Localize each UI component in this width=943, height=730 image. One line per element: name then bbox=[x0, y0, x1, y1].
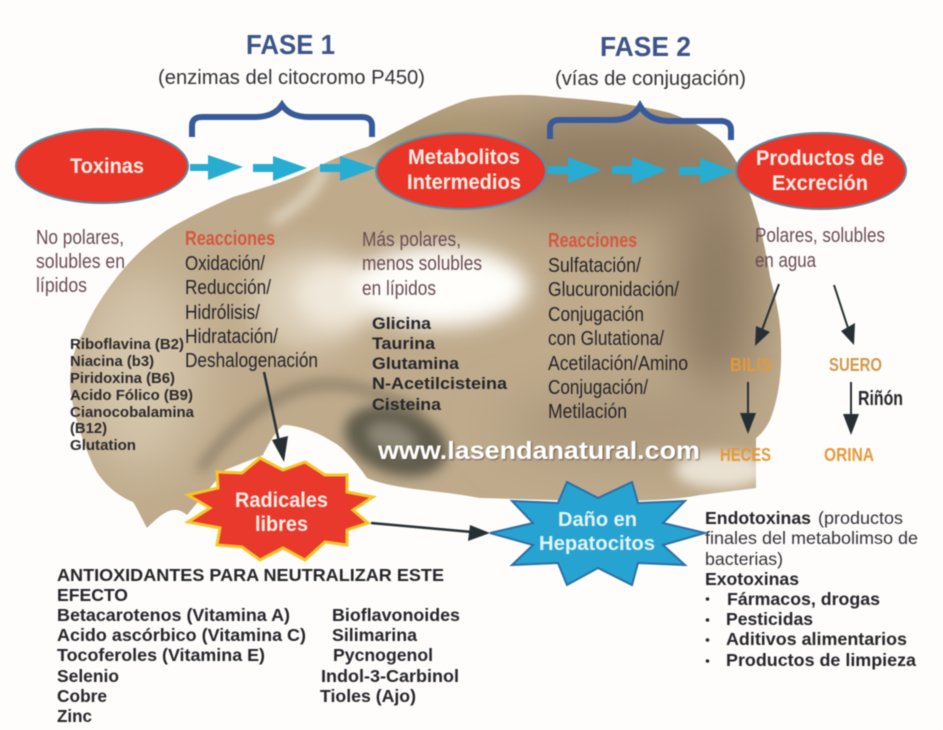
arrows: Fase 2 flow bbox=[548, 157, 735, 184]
labels: excretion routes: HECES bbox=[720, 445, 771, 465]
arrow: to orina bbox=[843, 382, 859, 435]
text block: endotoxinas y exotoxinas: Endotoxinas bbox=[705, 508, 811, 528]
text block: antioxidantes: Indol-3-Carbinol bbox=[321, 666, 459, 686]
heading: Fase 2: (vías de conjugación) bbox=[555, 68, 746, 90]
list: aminoácidos: N-Acetilcisteina bbox=[372, 374, 508, 393]
labels: excretion routes: BILIS bbox=[730, 355, 772, 375]
text block: antioxidantes: Pycnogenol bbox=[333, 645, 433, 665]
text: reacciones fase 2: Reacciones bbox=[548, 229, 637, 252]
heading: Fase 2 bbox=[555, 31, 746, 90]
text block: antioxidantes: Acido ascórbico (Vitamina C) bbox=[57, 625, 306, 645]
text block: antioxidantes: Cobre bbox=[57, 686, 107, 706]
node: Metabolitos Intermedios bbox=[376, 133, 546, 209]
text: reacciones fase 2: Conjugación bbox=[548, 303, 644, 326]
list: vitaminas: Niacina (b3) bbox=[70, 354, 154, 370]
text: polares solubles en agua: Polares, solubles bbox=[755, 224, 885, 247]
list: aminoácidos: Glicina bbox=[372, 314, 432, 333]
list: vitaminas: Riboflavina (B2) bbox=[70, 337, 184, 353]
text block: antioxidantes: ANTIOXIDANTES PARA NEUTRALIZAR ESTE bbox=[57, 565, 444, 585]
starburst: Daño en Hepatocitos bbox=[490, 482, 705, 585]
starburst: Radicales libres bbox=[188, 458, 373, 560]
list: vitaminas bbox=[70, 337, 195, 454]
list: aminoácidos: Taurina bbox=[372, 334, 436, 353]
text: reacciones fase 1: Hidrólisis/ bbox=[185, 301, 260, 324]
text block: antioxidantes: Tioles (Ajo) bbox=[320, 686, 416, 706]
text block: endotoxinas y exotoxinas: (productos bbox=[818, 508, 903, 528]
text: reacciones fase 1: Reducción/ bbox=[185, 276, 271, 299]
text: reacciones fase 1: Hidratación/ bbox=[185, 325, 278, 348]
text block: antioxidantes bbox=[57, 565, 460, 726]
node: Productos de Excreción: Productos de bbox=[756, 147, 884, 170]
node: Productos de Excreción: Excreción bbox=[772, 172, 868, 195]
text: reacciones fase 1: Reacciones bbox=[185, 227, 275, 250]
list: aminoácidos bbox=[372, 314, 508, 414]
arrow: to daño en hepatocitos bbox=[371, 523, 490, 541]
arrow: to bilis bbox=[755, 284, 779, 346]
website watermark: www.lasendanatural.com bbox=[377, 437, 700, 465]
heading: Fase 1 bbox=[158, 29, 425, 89]
text: polares solubles en agua bbox=[755, 224, 885, 272]
text: más polares bbox=[362, 228, 482, 300]
starburst: Radicales libres: Radicales bbox=[235, 489, 328, 512]
list: aminoácidos: Glutamina bbox=[372, 354, 460, 373]
node: Toxinas bbox=[16, 129, 188, 203]
node: Metabolitos Intermedios: Intermedios bbox=[407, 171, 521, 194]
text: más polares: Más polares, bbox=[362, 228, 461, 251]
text: más polares: en lípidos bbox=[362, 277, 436, 300]
text: reacciones fase 2 bbox=[548, 229, 688, 423]
node: Toxinas: Toxinas bbox=[70, 155, 144, 178]
arrows: Fase 1 flow bbox=[190, 155, 376, 181]
text: reacciones fase 2: Glucuronidación/ bbox=[548, 278, 679, 301]
text block: endotoxinas y exotoxinas: finales del metabolimso de bbox=[705, 528, 918, 548]
brace: Fase 2 bbox=[550, 106, 731, 140]
liver illustration bbox=[60, 90, 790, 535]
text block: endotoxinas y exotoxinas: Productos de limpieza bbox=[726, 650, 916, 670]
text: no polares: solubles en bbox=[36, 250, 125, 273]
arrow: to heces bbox=[740, 382, 756, 434]
text: reacciones fase 1: Oxidación/ bbox=[185, 252, 265, 275]
heading: Fase 1: FASE 1 bbox=[246, 29, 335, 60]
text block: antioxidantes: Bioflavonoides bbox=[332, 605, 460, 625]
brace: Fase 1 bbox=[192, 105, 372, 137]
text block: endotoxinas y exotoxinas: Fármacos, drogas bbox=[727, 589, 880, 609]
list: vitaminas: (B12) bbox=[70, 421, 107, 437]
starburst: Daño en Hepatocitos: Hepatocitos bbox=[539, 532, 655, 555]
text: más polares: menos solubles bbox=[362, 252, 482, 275]
text: reacciones fase 2: Sulfatación/ bbox=[548, 254, 641, 277]
text: polares solubles en agua: en agua bbox=[755, 249, 816, 272]
arrow: to radicales libres bbox=[264, 372, 288, 462]
text: reacciones fase 2: con Glutationa/ bbox=[548, 327, 664, 350]
text: reacciones fase 1 bbox=[185, 227, 318, 372]
label: Riñón: Riñón bbox=[858, 387, 903, 410]
text block: endotoxinas y exotoxinas: Exotoxinas bbox=[705, 569, 799, 589]
text: no polares: No polares, bbox=[36, 226, 124, 249]
labels: excretion routes: SUERO bbox=[829, 355, 882, 375]
text block: antioxidantes: Tocoferoles (Vitamina E) bbox=[57, 645, 265, 665]
arrow: to suero bbox=[834, 285, 855, 345]
labels: excretion routes bbox=[720, 355, 882, 465]
starburst: Daño en Hepatocitos: Daño en bbox=[558, 508, 637, 531]
text block: antioxidantes: Zinc bbox=[57, 706, 92, 726]
text block: endotoxinas y exotoxinas: Pesticidas bbox=[726, 609, 813, 629]
text: no polares bbox=[36, 226, 125, 297]
labels: excretion routes: ORINA bbox=[824, 445, 874, 465]
list: aminoácidos: Cisteina bbox=[372, 395, 442, 414]
node: Productos de Excreción bbox=[736, 133, 906, 209]
list: vitaminas: Acido Fólico (B9) bbox=[70, 388, 193, 404]
text block: endotoxinas y exotoxinas bbox=[705, 508, 918, 670]
text block: endotoxinas y exotoxinas: bacterias) bbox=[705, 549, 783, 569]
text: no polares: lípidos bbox=[36, 274, 87, 297]
text: reacciones fase 2: Conjugación/ bbox=[548, 376, 648, 399]
text block: antioxidantes: EFECTO bbox=[57, 585, 128, 605]
text block: antioxidantes: Silimarina bbox=[332, 625, 417, 645]
node: Metabolitos Intermedios: Metabolitos bbox=[408, 146, 520, 169]
heading: Fase 2: FASE 2 bbox=[600, 31, 691, 62]
list: vitaminas: Cianocobalamina bbox=[70, 405, 195, 421]
text block: endotoxinas y exotoxinas: Aditivos alimentarios bbox=[726, 629, 907, 649]
text block: antioxidantes: Betacarotenos (Vitamina A) bbox=[57, 605, 290, 625]
text: reacciones fase 2: Acetilación/Amino bbox=[548, 352, 688, 375]
text: reacciones fase 1: Deshalogenación bbox=[185, 349, 318, 372]
text block: antioxidantes: Selenio bbox=[57, 666, 119, 686]
heading: Fase 1: (enzimas del citocromo P450) bbox=[158, 67, 425, 89]
list: vitaminas: Piridoxina (B6) bbox=[70, 371, 175, 387]
list: vitaminas: Glutation bbox=[70, 438, 136, 454]
text: reacciones fase 2: Metilación bbox=[548, 400, 627, 423]
starburst: Radicales libres: libres bbox=[255, 513, 308, 536]
